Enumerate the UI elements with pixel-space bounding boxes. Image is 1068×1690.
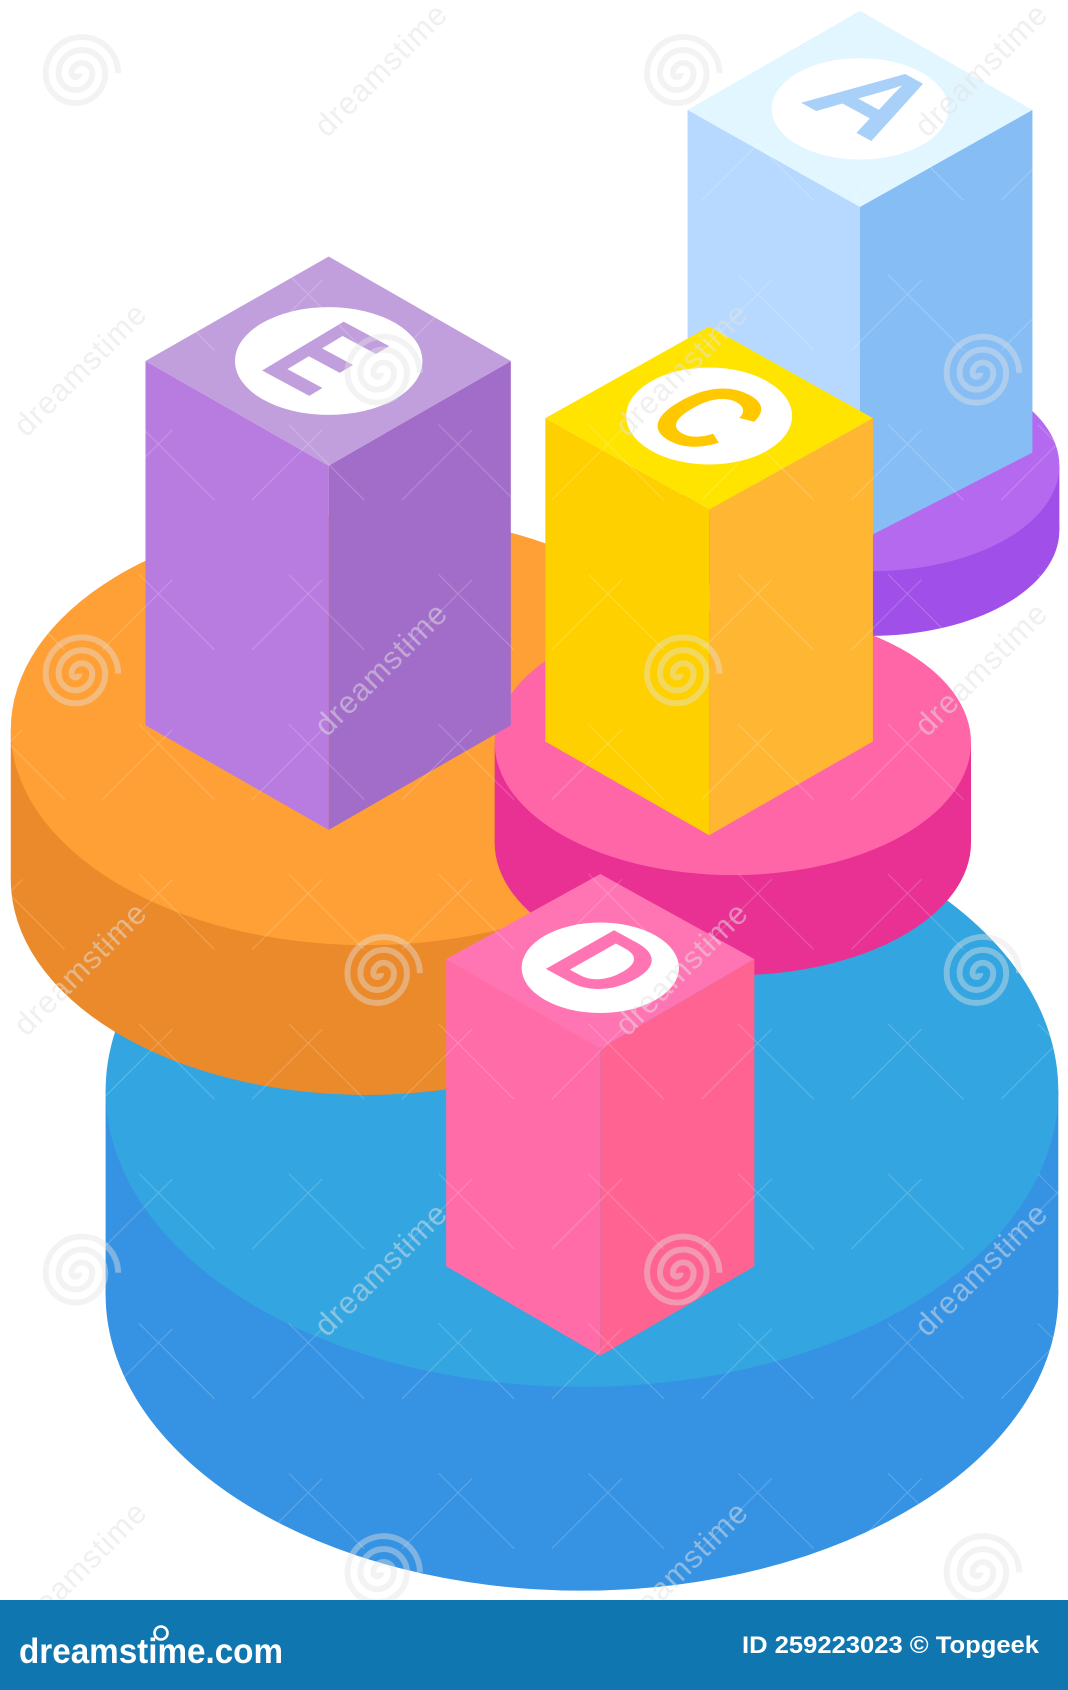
- letter E: E: [231, 303, 419, 413]
- column D: pink: [446, 874, 754, 1356]
- column C: yellow: [545, 327, 873, 835]
- watermark: diagonal text: dreamstime: [307, 596, 454, 743]
- watermark: diagonal text: dreamstime: [907, 1196, 1054, 1343]
- column E: purple: [145, 256, 511, 830]
- watermark: diagonal text: dreamstime: [7, 896, 153, 1042]
- footer bar: [0, 1600, 1068, 1690]
- footer logo spiral: [154, 1626, 168, 1640]
- footer logo text: dreamstime.com: [19, 1632, 283, 1671]
- watermark: diagonal text: dreamstime: [907, 596, 1054, 743]
- disc: pink: [495, 610, 971, 975]
- column A: light blue: [688, 11, 1032, 541]
- watermark: diagonal text: dreamstime: [7, 296, 153, 443]
- watermark: diagonal text: dreamstime: [307, 1196, 454, 1343]
- watermark: diagonal text: dreamstime: [608, 1495, 755, 1642]
- letter C: C: [613, 363, 803, 470]
- watermark: diagonal text: dreamstime: [907, 0, 1054, 144]
- disc: purple: [682, 360, 1059, 636]
- letter D: D: [519, 915, 694, 1013]
- watermark: diagonal text: dreamstime: [7, 1495, 153, 1642]
- watermark: diagonal text: dreamstime: [608, 296, 755, 443]
- letter A: A: [774, 45, 976, 156]
- watermark: diagonal text: dreamstime: [608, 896, 755, 1042]
- disc: orange: [11, 514, 722, 1095]
- watermark: diagonal text: dreamstime: [307, 0, 454, 144]
- image id and credit: ID 259223023 © Topgeek: [742, 1632, 1040, 1659]
- disc: large blue base: [106, 794, 1058, 1591]
